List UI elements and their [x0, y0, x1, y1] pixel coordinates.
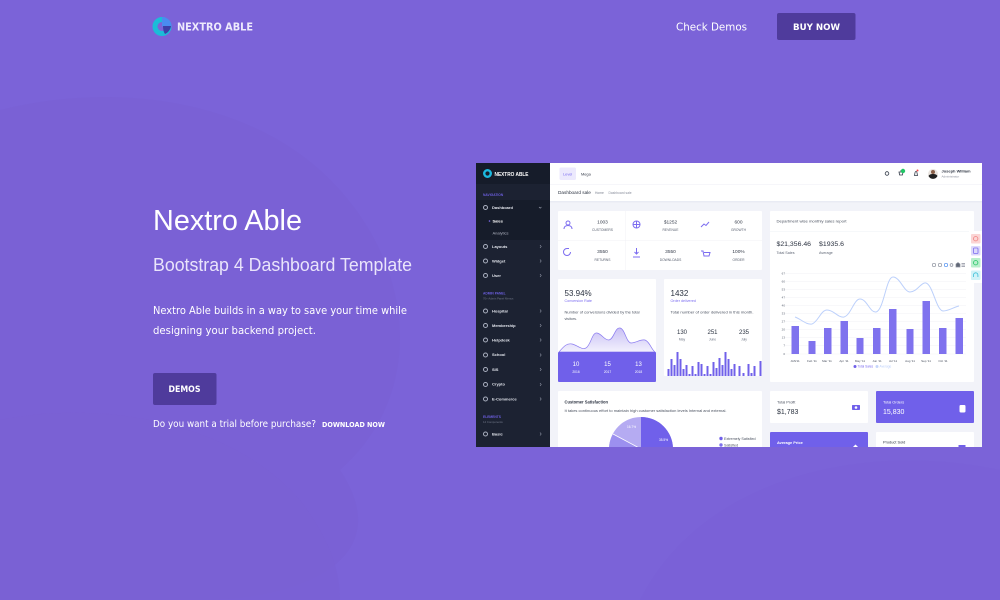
dashboard sidebar: Dashboard — [492, 205, 513, 210]
orders delivered card: 235 — [739, 330, 750, 336]
bar and line chart: May '11 — [855, 359, 865, 363]
bar and line chart: 20 — [782, 328, 785, 332]
dashboard sidebar: School — [492, 352, 505, 357]
pie chart: 35.5% — [659, 438, 668, 442]
dashboard sidebar: NEXTRO ABLE — [494, 172, 529, 178]
bar and line chart: 40 — [782, 304, 785, 308]
customer satisfaction card: Customer Satisfaction — [564, 400, 608, 404]
dashboard header: Home — [595, 191, 604, 195]
dashboard sidebar: Layouts — [492, 244, 508, 249]
dashboard header: Dashboard sale — [608, 191, 632, 195]
conversion card: 2018 — [635, 370, 642, 374]
bar and line chart: 60 — [782, 280, 785, 284]
average price card — [770, 432, 868, 447]
subtitle: Bootstrap 4 Dashboard Template — [153, 255, 412, 275]
orders delivered card: June — [709, 338, 716, 342]
bar and line chart: Average — [880, 365, 892, 369]
dashboard header: Mega — [581, 172, 592, 176]
logo — [155, 17, 253, 34]
bar and line chart: Jun '11 — [872, 359, 882, 363]
orders delivered card: 130 — [677, 330, 688, 336]
conversion card: 53.94% — [564, 289, 592, 298]
description: Nextro Able builds in a way to save your time while — [153, 305, 407, 317]
bar and line chart: 67 — [782, 272, 785, 276]
trial call to action: DOWNLOAD NOW — [322, 421, 385, 429]
stats card: 600 — [734, 220, 743, 226]
bar and line chart: 13 — [782, 336, 785, 340]
sales report card: Average — [819, 251, 833, 255]
dashboard sidebar: NAVIGATION — [483, 193, 504, 197]
dashboard header: Joseph William — [942, 168, 971, 174]
stats card — [558, 211, 762, 270]
stats card: 3550 — [665, 249, 676, 255]
bar and line chart: Oct '11 — [938, 359, 948, 363]
sales report card: $1935.6 — [819, 241, 844, 248]
bar and line chart: Sep '11 — [921, 359, 931, 363]
total orders card: 15,830 — [883, 409, 905, 416]
orders delivered card: May — [679, 338, 685, 342]
stats card: REVENUE — [663, 228, 679, 232]
sales report card — [770, 211, 974, 382]
trial call to action: Do you want a trial before purchase? — [153, 419, 316, 430]
total orders card: Total Orders — [883, 400, 904, 404]
dashboard screenshot — [476, 163, 982, 447]
dashboard header: Administrator — [942, 174, 959, 178]
bar and line chart: 0 — [783, 352, 785, 356]
conversion card: visitors. — [564, 317, 577, 321]
dashboard sidebar: SIS — [492, 367, 499, 372]
conversion card: 15 — [604, 362, 611, 368]
dashboard sidebar: Widget — [492, 258, 506, 264]
pie chart — [609, 417, 673, 447]
stats card: 1003 — [597, 220, 608, 226]
mini bar chart — [668, 352, 762, 376]
button: Demos: DEMOS — [168, 385, 200, 395]
dashboard header — [550, 163, 982, 202]
sales report card: Total Sales — [776, 251, 795, 255]
dashboard sidebar: ELEMENTS — [483, 415, 502, 419]
bar and line chart: Jul '11 — [889, 359, 898, 363]
logo: NEXTRO ABLE — [177, 22, 253, 34]
total orders card — [876, 391, 974, 423]
conversion card: 2016 — [572, 370, 580, 374]
orders delivered card: 1432 — [670, 289, 689, 298]
dashboard sidebar: 14 Components — [483, 420, 503, 424]
average price card: Average Price — [777, 440, 804, 445]
stats card: CUSTOMERS — [592, 228, 614, 232]
dashboard sidebar — [476, 163, 550, 447]
bar and line chart: Mar '11 — [822, 359, 832, 363]
dashboard sidebar: Hospital — [492, 308, 508, 314]
description: designing your backend project. — [153, 325, 316, 337]
nav link: Check Demos: Check Demos — [676, 20, 747, 34]
sales report card: Department wise monthly sales report — [776, 218, 847, 224]
product sold card: Product Sold — [883, 440, 905, 444]
dashboard sidebar: User — [492, 273, 501, 278]
bar and line chart — [782, 272, 966, 369]
dashboard sidebar: ADMIN PANEL — [483, 292, 506, 296]
bar and line chart: 7 — [783, 344, 785, 348]
dashboard sidebar: Helpdesk — [492, 338, 511, 342]
orders delivered card: Total number of order delivered in this month. — [670, 310, 754, 314]
conversion card: 10 — [573, 362, 580, 368]
bar and line chart: 33 — [782, 312, 785, 316]
dashboard sidebar: Crypto — [492, 382, 505, 386]
stats card: 3550 — [597, 249, 608, 255]
bar and line chart: Apr '11 — [839, 359, 849, 363]
stats card: $1252 — [664, 220, 677, 226]
bar and line chart: Feb '11 — [807, 359, 817, 363]
dashboard sidebar: Basic — [492, 432, 503, 436]
bar and line chart: 47 — [782, 296, 785, 300]
bar and line chart: Aug '11 — [905, 359, 915, 363]
stats card: 100% — [732, 249, 745, 255]
dashboard sidebar: Analytics — [492, 230, 509, 236]
bar and line chart: 53 — [782, 288, 785, 292]
sales report card: $21,356.46 — [776, 241, 811, 248]
description — [153, 305, 407, 337]
total profit card: Total Profit — [777, 400, 796, 404]
conversion card: Conversion Rate — [564, 299, 592, 303]
conversion card: Number of conversions divided by the total — [564, 310, 640, 314]
title: Nextro Able — [153, 205, 302, 237]
orders delivered card: 251 — [707, 330, 718, 336]
chart toolbar — [932, 262, 965, 267]
orders delivered card — [664, 279, 762, 376]
button: Demos — [153, 373, 216, 405]
dashboard sidebar: Sales — [492, 218, 504, 224]
button: Buy Now — [777, 13, 856, 40]
conversion card: 2017 — [604, 370, 611, 374]
bar and line chart: Total Sales — [858, 365, 873, 369]
floating side tabs — [969, 231, 982, 283]
orders delivered card: July — [741, 338, 747, 342]
stats card: DOWNLOADS — [660, 258, 682, 262]
customer satisfaction card — [558, 391, 762, 447]
total profit card: $1,783 — [777, 409, 799, 416]
orders delivered card: Order delivered — [670, 299, 696, 303]
stats card: RETURNS — [595, 258, 611, 262]
bar and line chart: JAN'11 — [790, 359, 800, 363]
product sold card — [876, 432, 974, 447]
stats card: GROWTH — [731, 228, 747, 232]
button: Buy Now: BUY NOW — [793, 23, 840, 33]
dashboard sidebar: 70+ Admin Panel Menus — [483, 296, 514, 300]
dashboard sidebar: Membership — [492, 323, 516, 328]
stats card: ORDER — [733, 258, 745, 262]
dashboard sidebar: Forms — [492, 446, 505, 450]
dashboard header: Level — [563, 172, 572, 176]
customer satisfaction card: It takes continuous effort to maintain high customer satisfaction levels Internal and external. — [564, 409, 726, 413]
dashboard sidebar: E-Commerce — [492, 396, 517, 402]
conversion card — [558, 279, 656, 382]
conversion card: 13 — [635, 362, 642, 368]
customer satisfaction card: Extremely Satisfied — [724, 437, 756, 441]
customer satisfaction card: Satisfied — [724, 444, 738, 448]
dashboard header: Dashboard sale — [558, 190, 591, 195]
pie chart: 16.7% — [627, 425, 636, 429]
bar and line chart: 27 — [782, 320, 785, 324]
total profit card — [770, 391, 868, 423]
